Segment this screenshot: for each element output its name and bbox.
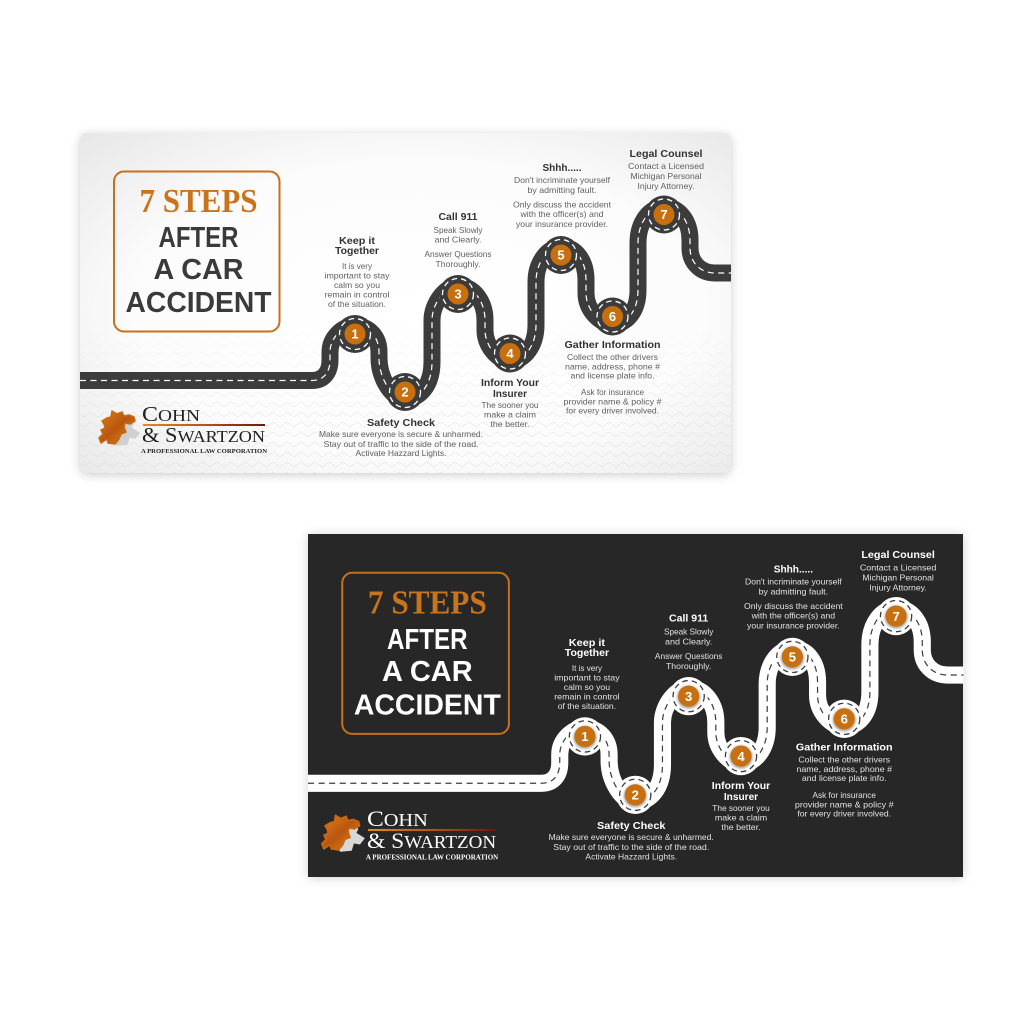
text: step 2 safety check: Activate Hazzard Lights.	[356, 449, 446, 458]
text: step 1 keep it together: Together	[335, 245, 379, 257]
text: step 5 shhh: your insurance provider.	[747, 622, 840, 631]
text: step 6 gather information	[795, 742, 894, 818]
step node 2	[386, 373, 424, 411]
text: step 2 safety check: Activate Hazzard Lights.	[585, 852, 677, 861]
text: step 1 keep it together: It is very	[342, 262, 373, 271]
text: step 6 gather information: Ask for insurance	[581, 388, 644, 397]
text: step 3 call 911: Speak Slowly	[664, 628, 714, 637]
text: step 3 call 911: Thoroughly.	[436, 260, 480, 269]
text: step 7 legal counsel: Contact a Licensed	[628, 162, 704, 171]
logo: Cohn & Swartzon	[322, 806, 498, 861]
logo: Cohn & Swartzon: COHN	[367, 806, 428, 831]
text: step 2 safety check	[549, 820, 714, 861]
step node 2: 2	[632, 788, 639, 803]
text: step 5 shhh	[744, 563, 843, 631]
text: step 1 keep it together: important to stay	[324, 272, 390, 280]
step node 1: 1	[581, 729, 589, 744]
title box: AFTER	[158, 222, 238, 254]
text: step 2 safety check: Make sure everyone is secure & unharmed.	[319, 430, 483, 439]
step node 7	[877, 597, 915, 635]
text: step 5 shhh: with the officer(s) and	[519, 210, 604, 219]
text: step 1 keep it together: important to stay	[554, 674, 621, 683]
step node 1: 1	[351, 327, 359, 342]
text: step 6 gather information: name, address, phone #	[796, 765, 892, 774]
text: step 3 call 911: Call 911	[669, 613, 708, 625]
road	[80, 207, 731, 399]
text: step 4 inform your insurer	[481, 377, 539, 429]
step node 6: 6	[841, 712, 848, 727]
text: step 5 shhh: Don't incriminate yourself	[514, 176, 611, 185]
text: step 6 gather information: Ask for insurance	[813, 791, 876, 800]
title box: ACCIDENT	[126, 287, 272, 319]
title box: AFTER	[387, 624, 468, 656]
step node 5: 5	[557, 248, 565, 263]
text: step 3 call 911: Call 911	[438, 211, 478, 223]
text: step 3 call 911: Thoroughly.	[666, 662, 711, 671]
text: step 7 legal counsel: Legal Counsel	[861, 549, 935, 561]
title box: ACCIDENT	[354, 689, 501, 721]
logo: Cohn & Swartzon: A PROFESSIONAL LAW CORPORATION	[141, 448, 267, 455]
logo: Cohn & Swartzon: COHN	[142, 402, 200, 426]
step node 5	[542, 236, 580, 274]
panel: dark card	[308, 534, 964, 878]
title box	[342, 573, 509, 734]
icon: puzzle piece	[99, 411, 139, 445]
step node 3	[670, 677, 708, 715]
step node 5: 5	[789, 650, 796, 665]
text: step 1 keep it together	[324, 235, 390, 309]
text: step 5 shhh: your insurance provider.	[516, 220, 608, 229]
title box	[114, 172, 280, 332]
text: step 7 legal counsel: Michigan Personal	[862, 573, 934, 582]
step node 6: 6	[609, 309, 616, 324]
text: step 7 legal counsel: Legal Counsel	[630, 148, 703, 160]
step node 7: 7	[660, 207, 668, 222]
step node 4: 4	[506, 346, 514, 361]
text: step 7 legal counsel: Injury Attorney.	[869, 583, 927, 592]
text: step 1 keep it together: Keep it	[339, 235, 376, 247]
text: step 6 gather information	[564, 339, 662, 416]
text: step 1 keep it together: remain in control	[554, 693, 620, 702]
text: step 6 gather information: Gather Information	[564, 339, 660, 351]
text: step 5 shhh: with the officer(s) and	[751, 612, 836, 621]
text: step 5 shhh: Shhh.....	[542, 162, 582, 174]
text: step 3 call 911: and Clearly.	[665, 637, 712, 646]
text: step 4 inform your insurer: the better.	[490, 420, 530, 429]
text: step 5 shhh: Only discuss the accident	[513, 200, 612, 210]
step node 1	[566, 717, 604, 756]
text: step 7 legal counsel: Injury Attorney.	[638, 182, 694, 191]
text: step 6 gather information: and license plate info.	[570, 372, 654, 380]
text: step 6 gather information: Collect the other drivers	[567, 353, 658, 362]
text: step 6 gather information: Collect the other drivers	[798, 756, 890, 765]
title box: A CAR	[382, 656, 473, 688]
text: step 3 call 911	[424, 211, 492, 269]
dark artwork group	[308, 549, 964, 861]
text: step 5 shhh: Don't incriminate yourself	[745, 577, 842, 586]
text: step 2 safety check: Safety Check	[597, 820, 666, 832]
text: step 1 keep it together	[554, 637, 621, 711]
step node 2	[616, 776, 654, 814]
text: step 2 safety check: Stay out of traffic to the side of the road.	[553, 843, 709, 852]
text: step 6 gather information: Gather Information	[796, 742, 893, 754]
text: step 7 legal counsel: Michigan Personal	[630, 172, 702, 181]
text: step 1 keep it together: calm so you	[564, 683, 611, 692]
step node 7: 7	[892, 609, 900, 624]
text: step 1 keep it together: of the situation.	[558, 702, 616, 711]
text: step 4 inform your insurer: Insurer	[493, 388, 527, 400]
text: step 5 shhh: Shhh.....	[774, 563, 813, 575]
text: step 2 safety check: Stay out of traffic to the side of the road.	[324, 440, 478, 449]
text: step 4 inform your insurer: The sooner you	[482, 401, 539, 410]
text: step 2 safety check: Make sure everyone is secure & unharmed.	[549, 833, 714, 842]
text: step 1 keep it together: Keep it	[569, 637, 606, 649]
title box: 7 STEPS	[368, 584, 487, 622]
text: step 1 keep it together: calm so you	[334, 281, 380, 290]
text: step 4 inform your insurer: Inform Your	[712, 780, 770, 792]
text: step 1 keep it together: of the situation.	[328, 300, 386, 309]
text: step 6 gather information: provider name & policy #	[564, 398, 662, 406]
step node 4: 4	[737, 749, 745, 764]
text: step 1 keep it together: It is very	[572, 664, 603, 673]
step node 7	[645, 196, 683, 234]
text: step 4 inform your insurer	[712, 780, 770, 832]
text: step 5 shhh: by admitting fault.	[759, 587, 828, 596]
step node 4	[491, 334, 529, 372]
text: step 4 inform your insurer: the better.	[721, 823, 761, 832]
text: step 3 call 911: Speak Slowly	[434, 226, 483, 235]
text: step 7 legal counsel	[628, 148, 704, 191]
text: step 7 legal counsel: Contact a Licensed	[860, 563, 937, 572]
logo: Cohn & Swartzon: & SWARTZON	[367, 828, 496, 853]
title box: A CAR	[154, 254, 244, 286]
text: step 4 inform your insurer: The sooner you	[712, 804, 770, 813]
text: step 2 safety check: Safety Check	[367, 417, 435, 429]
text: step 6 gather information: provider name & policy #	[795, 800, 894, 809]
road	[308, 609, 964, 802]
text: step 6 gather information: name, address, phone #	[565, 362, 660, 372]
logo: Cohn & Swartzon: & SWARTZON	[142, 423, 265, 447]
step node 3: 3	[454, 287, 462, 302]
text: step 6 gather information: and license plate info.	[802, 774, 887, 783]
step node 4	[722, 737, 760, 775]
title box: 7 STEPS	[140, 183, 258, 220]
text: step 6 gather information: for every driver involved.	[797, 809, 891, 818]
text: step 3 call 911: Answer Questions	[655, 652, 722, 661]
text: step 7 legal counsel	[860, 549, 937, 592]
logo: Cohn & Swartzon: A PROFESSIONAL LAW CORPORATION	[366, 854, 498, 861]
text: step 6 gather information: for every driver involved.	[566, 406, 659, 416]
step node 1	[336, 315, 374, 353]
step node 6	[825, 700, 863, 738]
step node 3: 3	[685, 689, 692, 704]
text: step 1 keep it together: remain in control	[324, 290, 390, 300]
text: step 4 inform your insurer: make a claim	[484, 410, 536, 420]
text: step 4 inform your insurer: make a claim	[715, 814, 767, 823]
step node 2: 2	[401, 385, 409, 400]
icon: puzzle piece	[322, 815, 364, 851]
text: step 5 shhh: by admitting fault.	[528, 186, 596, 195]
text: step 3 call 911: Answer Questions	[424, 250, 492, 259]
text: step 3 call 911: and Clearly.	[434, 236, 482, 244]
text: step 5 shhh: Only discuss the accident	[744, 602, 843, 611]
text: step 3 call 911	[655, 613, 722, 671]
logo: Cohn & Swartzon	[99, 402, 267, 455]
text: step 1 keep it together: Together	[565, 647, 609, 659]
step node 6	[594, 298, 632, 336]
text: step 2 safety check	[319, 417, 483, 458]
text: step 4 inform your insurer: Insurer	[724, 791, 758, 803]
step node 5	[773, 638, 812, 676]
panel: light card	[80, 133, 731, 475]
step node 3	[439, 275, 477, 313]
text: step 5 shhh	[513, 162, 612, 229]
text: step 4 inform your insurer: Inform Your	[481, 377, 539, 389]
